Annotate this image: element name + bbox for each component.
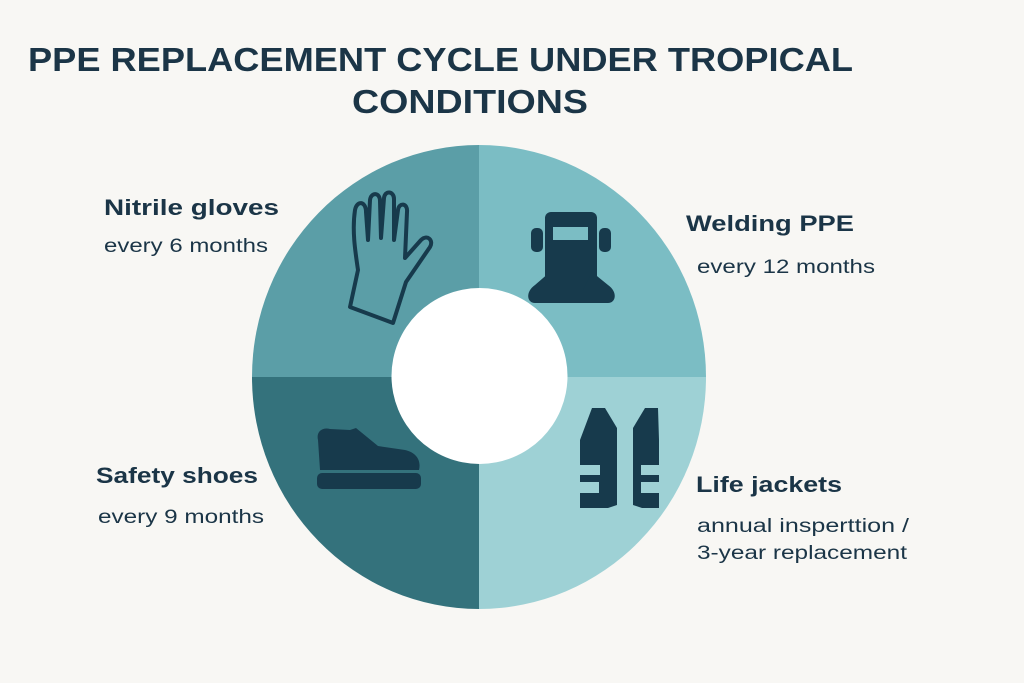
icon: welding mask <box>528 212 615 303</box>
label: life jackets: Life jackets <box>696 472 842 497</box>
label: welding ppe: Welding PPE <box>686 211 854 236</box>
title: CONDITIONS <box>352 83 588 120</box>
label: life jackets: 3-year replacement <box>697 543 908 564</box>
label: nitrile gloves: Nitrile gloves <box>104 195 279 220</box>
label: safety shoes: every 9 months <box>98 507 264 528</box>
label: welding ppe: every 12 months <box>697 257 875 278</box>
icon: glove <box>350 192 431 323</box>
icon: life jacket <box>580 408 659 508</box>
label: safety shoes <box>96 463 264 528</box>
title: PPE REPLACEMENT CYCLE UNDER TROPICAL <box>28 41 853 78</box>
label: life jackets <box>696 472 910 564</box>
label: nitrile gloves <box>104 195 279 257</box>
label: nitrile gloves: every 6 months <box>104 236 268 257</box>
label: safety shoes: Safety shoes <box>96 463 258 488</box>
donut chart <box>252 145 706 609</box>
title <box>28 41 853 120</box>
icon: safety shoe <box>317 428 421 489</box>
label: welding ppe <box>686 211 875 278</box>
label: life jackets: annual insperttion / <box>697 516 910 537</box>
